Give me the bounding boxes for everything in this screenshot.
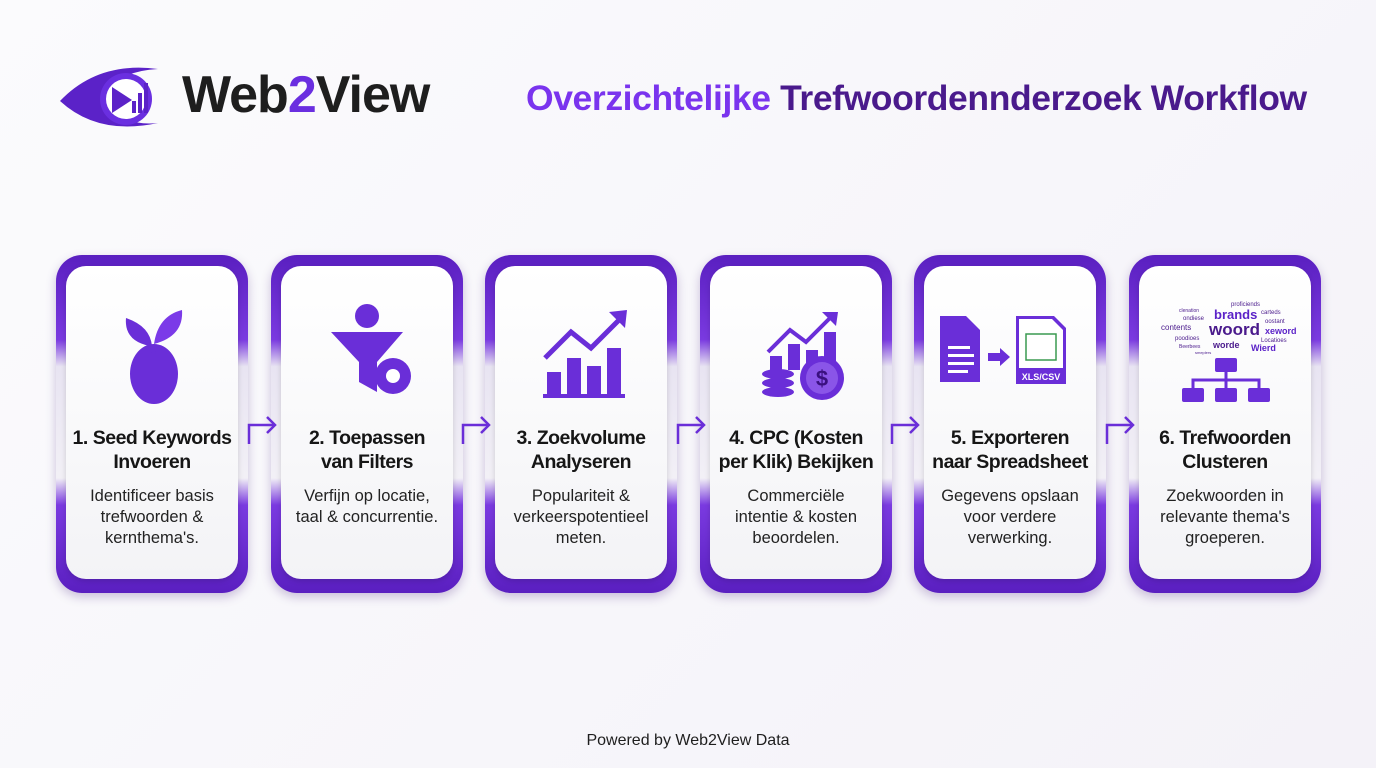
arrow 1 — [248, 416, 277, 444]
card 6: relevante thema's — [1160, 508, 1290, 526]
card 3 — [485, 255, 677, 593]
card 1: Invoeren — [113, 451, 191, 473]
icon: word cloud hierarchy: carteds — [1261, 310, 1281, 316]
icon: word cloud hierarchy: proficiends — [1231, 302, 1260, 308]
card 5: voor verdere — [964, 508, 1056, 526]
title: Overzichtelijke Trefwoordennderzoek Workflow — [526, 78, 1307, 118]
icon: word cloud hierarchy: Wierd — [1251, 343, 1276, 353]
icon: word cloud hierarchy: brands — [1214, 307, 1257, 322]
logo — [60, 66, 430, 126]
icon: word cloud hierarchy: worde — [1212, 340, 1240, 350]
card 5: verwerking. — [968, 529, 1052, 547]
card 5: Gegevens opslaan — [941, 487, 1079, 505]
icon: export to spreadsheet: XLS/CSV — [1022, 372, 1060, 382]
card 3: Analyseren — [531, 451, 631, 473]
card 1: kernthema's. — [105, 529, 199, 547]
card 1: trefwoorden & — [101, 508, 203, 526]
footer: Powered by Web2View Data — [586, 732, 790, 749]
card 4: 4. CPC (Kosten — [729, 427, 863, 449]
icon: word cloud hierarchy: clenation — [1179, 308, 1199, 314]
card 1: 1. Seed Keywords — [73, 427, 231, 449]
card 6: Clusteren — [1182, 451, 1268, 473]
arrow 4 — [890, 416, 920, 444]
card 6 — [1129, 255, 1321, 593]
card 3: 3. Zoekvolume — [517, 427, 645, 449]
icon: cpc coins — [762, 312, 844, 400]
icon: growth chart — [543, 310, 627, 398]
card 2: van Filters — [321, 451, 413, 473]
card 2: Verfijn op locatie, — [304, 487, 430, 505]
card 4 — [700, 255, 892, 593]
card 6: 6. Trefwoorden — [1159, 427, 1291, 449]
icon: word cloud hierarchy: woord — [1208, 320, 1260, 339]
card 3: Populariteit & — [532, 487, 630, 505]
card 4: intentie & kosten — [735, 508, 857, 526]
arrow 5 — [1106, 416, 1135, 444]
icon: cpc coins: $ — [816, 366, 828, 391]
card 3: meten. — [556, 529, 606, 547]
card 6: groeperen. — [1185, 529, 1265, 547]
icon: word cloud hierarchy — [1161, 302, 1297, 402]
icon: export to spreadsheet — [940, 316, 1066, 384]
card 1 — [56, 255, 248, 593]
arrow 3 — [676, 416, 706, 444]
logo: Web2View — [182, 66, 429, 124]
icon: word cloud hierarchy: Beerbees — [1179, 344, 1201, 350]
card 6: Zoekwoorden in — [1166, 487, 1284, 505]
icon: word cloud hierarchy: oostant — [1265, 319, 1285, 325]
card 2 — [271, 255, 463, 593]
card 1: Identificeer basis — [90, 487, 214, 505]
arrow 2 — [462, 416, 491, 444]
icon: word cloud hierarchy: contents — [1161, 323, 1191, 332]
icon: seedling — [126, 310, 182, 404]
card 5: 5. Exporteren — [951, 427, 1069, 449]
icon: word cloud hierarchy: xeword — [1265, 326, 1297, 336]
card 4: beoordelen. — [752, 529, 840, 547]
card 4: per Klik) Bekijken — [719, 451, 873, 473]
card 3: verkeerspotentieel — [514, 508, 648, 526]
icon: word cloud hierarchy: ondiese — [1183, 316, 1205, 322]
card 5: naar Spreadsheet — [932, 451, 1088, 473]
card 2: taal & concurrentie. — [296, 508, 438, 526]
card 2: 2. Toepassen — [309, 427, 425, 449]
icon: filter gears — [331, 304, 411, 394]
card 5 — [914, 255, 1106, 593]
icon: word cloud hierarchy: poodioes — [1175, 336, 1199, 342]
icon: word cloud hierarchy: Locatioes — [1261, 338, 1287, 344]
icon: word cloud hierarchy: smeplers — [1195, 350, 1211, 355]
card 4: Commerciële — [747, 487, 845, 505]
